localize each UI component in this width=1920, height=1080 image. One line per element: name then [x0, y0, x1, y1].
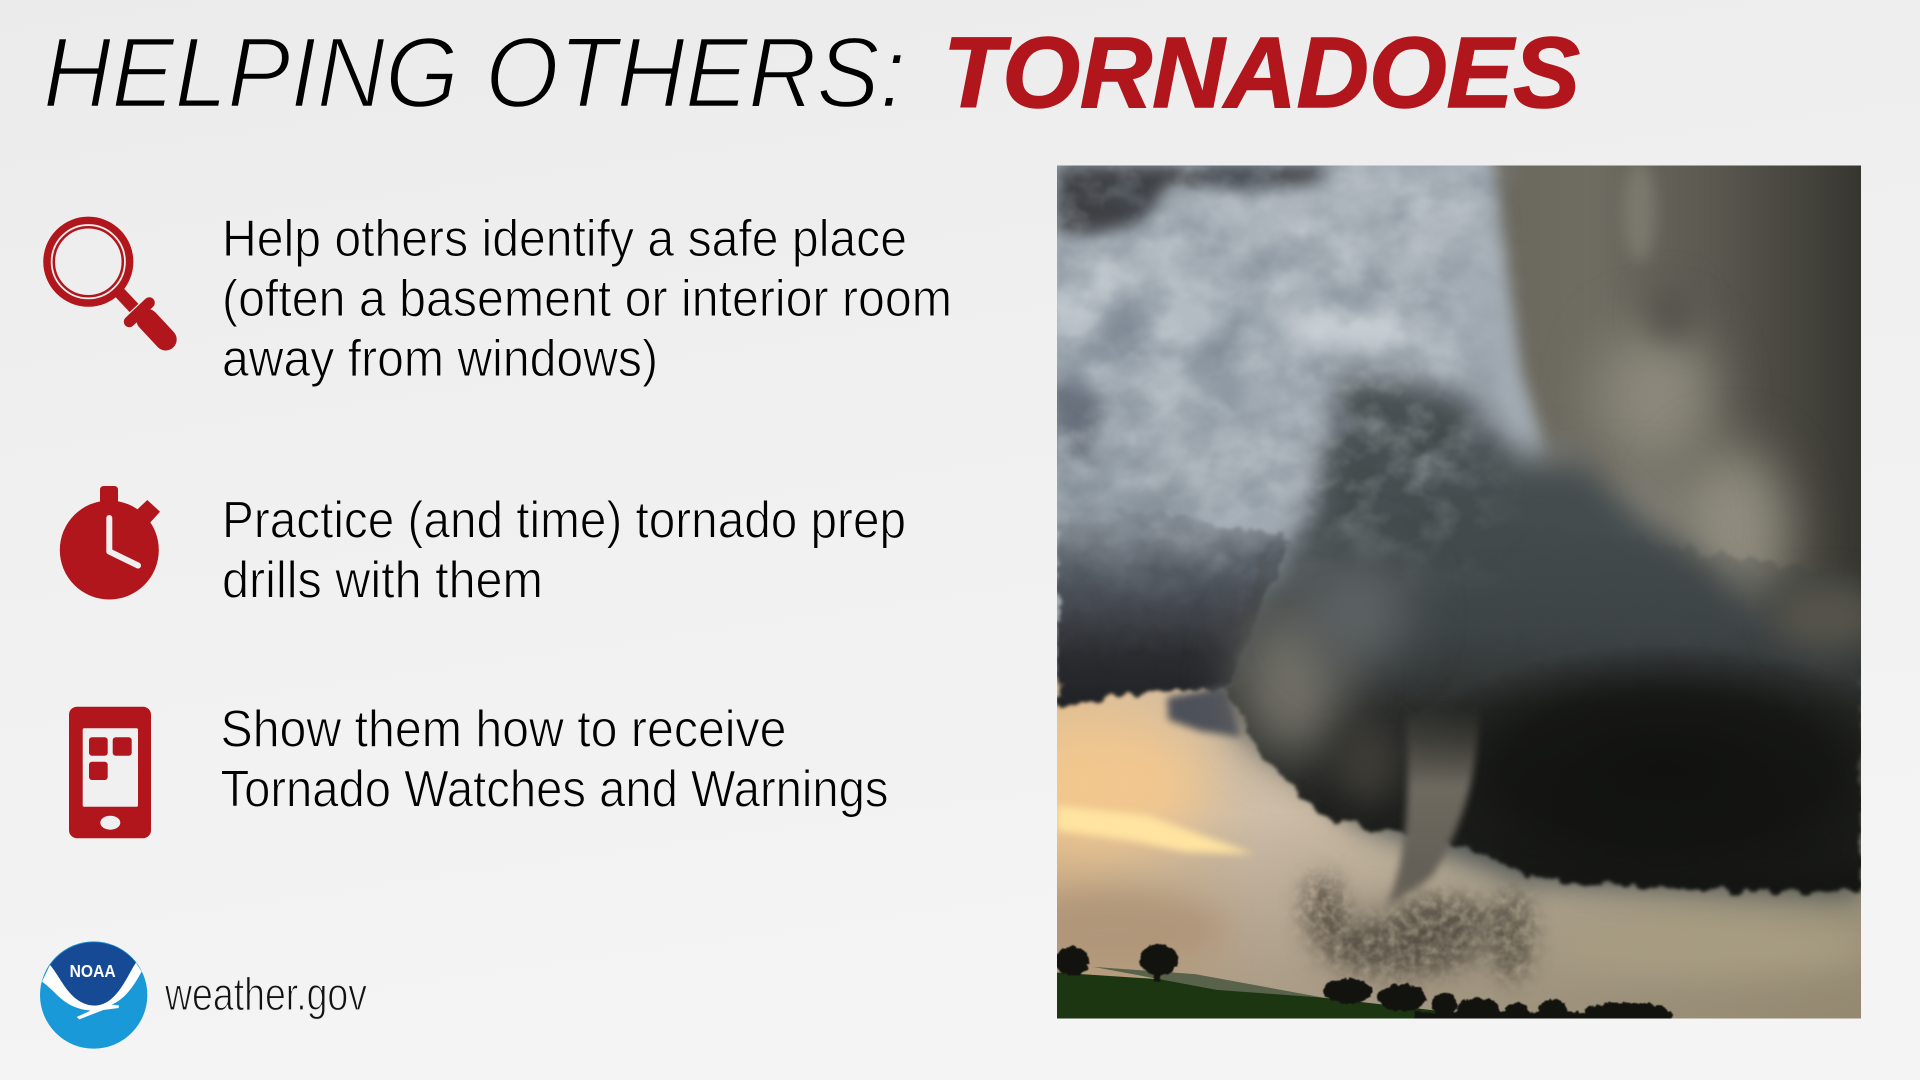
- storm mass upper: [1227, 374, 1861, 897]
- funnel: [1386, 706, 1479, 907]
- photo: tornado under storm cloud: [1057, 166, 1861, 1018]
- logo: NOAA: NOAA: [70, 961, 116, 981]
- text: identify a safe place: Help others identify a safe place: [222, 210, 907, 268]
- text: identify a safe place: away from windows): [222, 330, 658, 388]
- item: practice drills: [60, 486, 906, 610]
- item: receive alerts: [69, 700, 888, 838]
- text: practice drills: Practice (and time) tornado prep: [222, 492, 906, 550]
- text: receive alerts: Show them how to receive: [220, 700, 786, 758]
- item: identify a safe place: [47, 210, 952, 388]
- text: receive alerts: [220, 700, 888, 818]
- text: practice drills: drills with them: [222, 552, 543, 610]
- title: TORNADOES: [943, 17, 1580, 129]
- text: identify a safe place: [222, 210, 952, 388]
- text: weather.gov: weather.gov: [164, 968, 367, 1020]
- cloud texture: [1057, 166, 1507, 582]
- icon: stopwatch: [60, 486, 160, 600]
- icon: smartphone: [69, 707, 151, 838]
- sky and clouds: [992, 122, 1897, 1019]
- ground and trees: [1055, 944, 1672, 1024]
- icon: magnifying glass: [47, 220, 166, 340]
- debris cloud: [1302, 874, 1533, 981]
- text: receive alerts: Tornado Watches and Warnings: [220, 760, 888, 818]
- text: identify a safe place: (often a basement or interior room: [222, 270, 952, 328]
- text: practice drills: [222, 492, 906, 610]
- title: HELPING OTHERS:: [43, 17, 906, 129]
- logo: NOAA: [40, 941, 147, 1049]
- title: [43, 17, 1580, 129]
- storm mass lower: [1167, 509, 1920, 892]
